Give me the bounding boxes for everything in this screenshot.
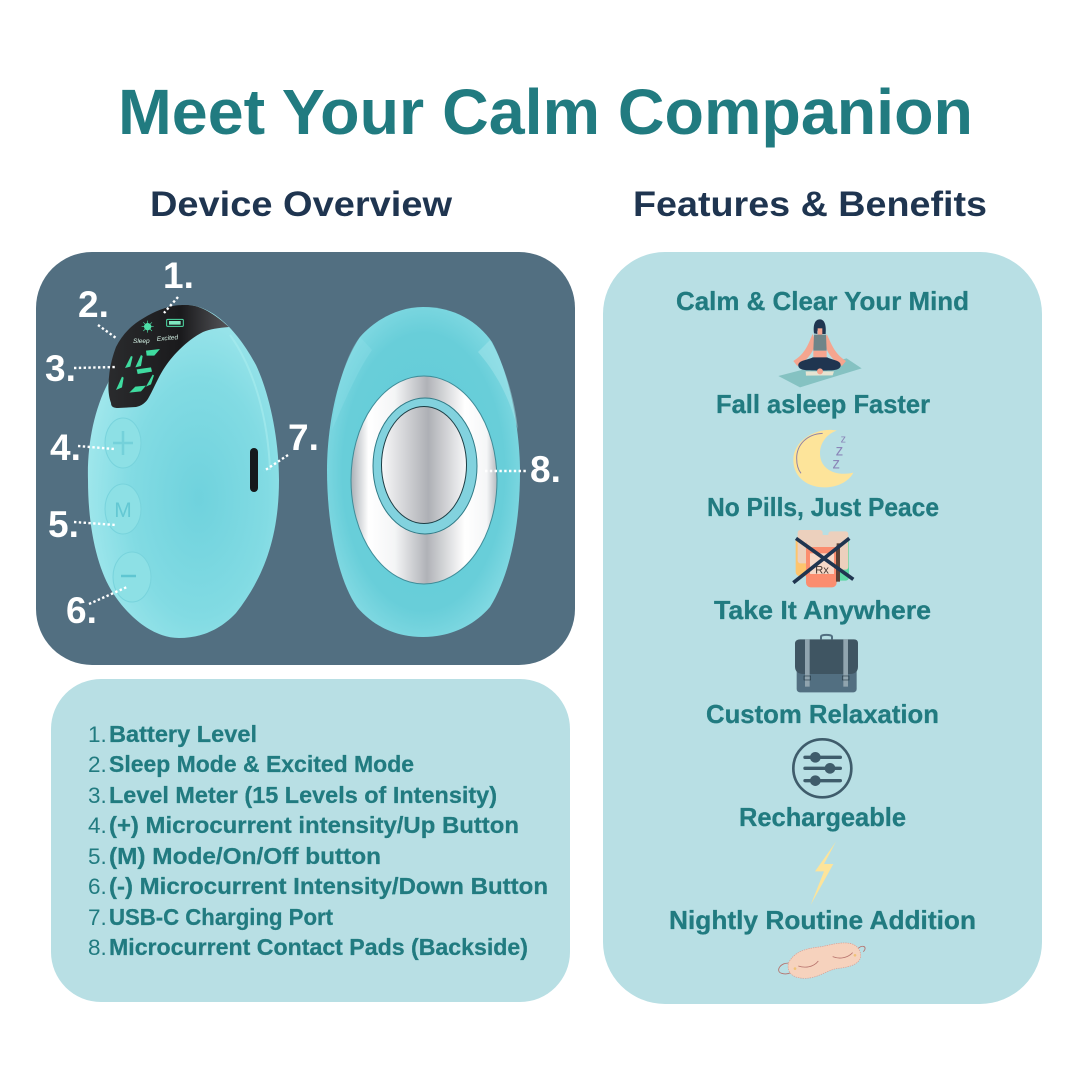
centre contact pad <box>382 406 466 524</box>
device: front view <box>88 305 279 638</box>
button: mode <box>105 484 141 534</box>
feature heading: routine: Nightly Routine Addition <box>669 905 976 935</box>
feature heading: calm: Calm & Clear Your Mind <box>676 286 969 316</box>
callout 2 <box>78 284 116 338</box>
legend item 4: (+) Microcurrent intensity/Up Button <box>109 812 519 838</box>
callout 8 <box>485 449 561 490</box>
legend item 2: Sleep Mode & Excited Mode <box>109 751 414 777</box>
legend item 5: (M) Mode/On/Off button <box>109 843 381 869</box>
contact ring <box>373 398 477 534</box>
callout 8: 8. <box>530 449 561 490</box>
feature heading: no pills: No Pills, Just Peace <box>707 492 939 522</box>
legend item 1: Battery Level <box>109 721 257 747</box>
panel: numbered legend <box>51 679 570 1002</box>
legend item 4: 4. <box>88 813 107 838</box>
callout 1: 1. <box>163 255 194 296</box>
callout 2: 2. <box>78 284 109 325</box>
device: back view <box>327 307 520 637</box>
icon: sleep mask <box>779 943 865 978</box>
title: Meet Your Calm Companion <box>118 76 973 148</box>
callout 5: 5. <box>48 504 79 545</box>
legend item 7: USB-C Charging Port <box>109 904 333 930</box>
legend item 8: Microcurrent Contact Pads (Backside) <box>109 934 528 960</box>
feature heading: sleep: Fall asleep Faster <box>716 389 930 419</box>
button: minus <box>113 552 151 602</box>
legend item 6: 6. <box>88 874 107 899</box>
panel: device overview photo <box>36 252 575 665</box>
button: plus <box>105 418 141 468</box>
level meter segments <box>116 349 160 393</box>
legend item 3: 3. <box>88 783 107 808</box>
legend item 5: 5. <box>88 844 107 869</box>
USB-C port <box>250 448 258 492</box>
panel: features and benefits <box>603 252 1042 1004</box>
icon: lightning bolt <box>811 842 836 905</box>
heading: features and benefits: Features & Benefits <box>633 185 987 224</box>
icon: crescent moon: z <box>832 456 840 473</box>
icon: crescent moon: z <box>841 434 846 446</box>
icon: battery <box>167 319 183 326</box>
callout 4: 4. <box>50 427 81 468</box>
icon: meditating woman <box>778 319 862 387</box>
legend item 3: Level Meter (15 Levels of Intensity) <box>109 782 497 808</box>
icon: briefcase <box>795 635 858 692</box>
feature heading: rechargeable: Rechargeable <box>739 802 906 832</box>
icon: crescent moon <box>793 430 853 487</box>
feature heading: custom: Custom Relaxation <box>706 699 939 729</box>
callout 7 <box>264 417 319 471</box>
button: mode: M <box>114 499 132 522</box>
legend item 2: 2. <box>88 752 107 777</box>
icon: crossed-out pill bottles: Rx <box>815 564 829 576</box>
device screen <box>108 305 229 408</box>
legend item 8: 8. <box>88 935 107 960</box>
callout 4 <box>50 427 114 468</box>
callout 6: 6. <box>66 590 97 631</box>
heading: device overview: Device Overview <box>150 185 453 224</box>
silver plate <box>351 376 497 584</box>
icon: crescent moon: z <box>836 442 843 459</box>
icon: sun sleep mode <box>142 321 154 333</box>
callout 6 <box>66 587 127 631</box>
excited label: Excited <box>157 334 179 343</box>
callout 3: 3. <box>45 348 76 389</box>
icon: sliders <box>793 739 851 797</box>
callout 3 <box>45 348 116 389</box>
callout 5 <box>48 504 116 545</box>
icon: crossed-out pill bottles <box>793 530 853 587</box>
legend item 7: 7. <box>88 905 107 930</box>
callout 7: 7. <box>288 417 319 458</box>
sleep label: Sleep <box>133 338 150 345</box>
feature heading: portable: Take It Anywhere <box>714 595 931 625</box>
legend item 1: 1. <box>88 722 107 747</box>
legend item 6: (-) Microcurrent Intensity/Down Button <box>109 873 548 899</box>
